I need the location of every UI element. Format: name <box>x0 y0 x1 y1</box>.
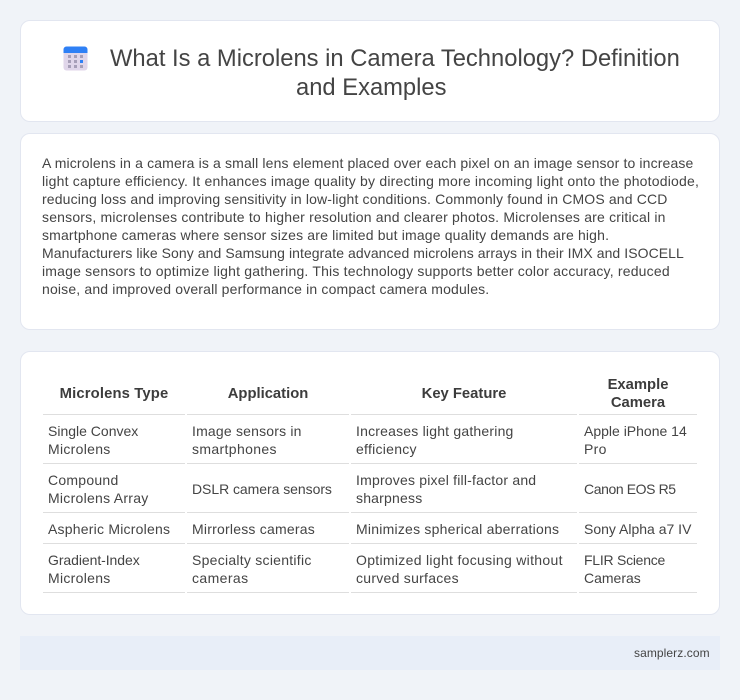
row: gradient-index: FLIR Science <box>584 552 665 568</box>
row: aspheric: Sony Alpha a7 IV <box>584 521 691 537</box>
title: What Is a Microlens in Camera Technology? Definition <box>110 45 680 72</box>
row: gradient-index: Gradient-Index <box>48 552 140 568</box>
footer bar <box>20 636 720 670</box>
table panel <box>20 351 720 615</box>
icon: calendar <box>64 46 88 70</box>
row: gradient-index: Optimized light focusing without <box>356 552 563 568</box>
row: gradient-index: cameras <box>192 570 248 586</box>
column headers: Microlens Type <box>60 386 168 402</box>
description text: light capture efficiency. It enhances image quality by directing more incoming light onto the photodiode, <box>42 173 699 189</box>
column headers: Key Feature <box>422 386 506 402</box>
title <box>110 45 680 101</box>
title: and Examples <box>296 74 447 101</box>
column headers: Application <box>228 386 308 402</box>
row: gradient-index: curved surfaces <box>356 570 459 586</box>
row: gradient-index <box>48 552 665 586</box>
description text: image sensors to optimize light gathering. This technology supports better color accuracy, reduced <box>42 263 670 279</box>
row: single convex <box>48 423 687 457</box>
row: aspheric: Mirrorless cameras <box>192 521 315 537</box>
row: compound: sharpness <box>356 490 422 506</box>
description text: A microlens in a camera is a small lens element placed over each pixel on an image sensor to increase <box>42 155 693 171</box>
description text: sensors, microlenses contribute to higher resolution and clearer photos. Microlenses are critical in <box>42 209 666 225</box>
row: aspheric: Aspheric Microlens <box>48 521 170 537</box>
row: compound: Canon EOS R5 <box>584 481 676 497</box>
row: single convex: Increases light gathering <box>356 423 514 439</box>
row: single convex: Apple iPhone 14 <box>584 423 687 439</box>
row: gradient-index: Specialty scientific <box>192 552 312 568</box>
row: compound: Microlens Array <box>48 490 149 506</box>
row: gradient-index: Microlens <box>48 570 111 586</box>
row: compound <box>48 472 676 506</box>
row: compound: Compound <box>48 472 118 488</box>
description panel <box>20 133 720 330</box>
row: gradient-index: Cameras <box>584 570 641 586</box>
row: single convex: Single Convex <box>48 423 138 439</box>
row: single convex: Microlens <box>48 441 111 457</box>
description text: Manufacturers like Sony and Samsung integrate advanced microlens arrays in their IMX and ISOCELL <box>42 245 684 261</box>
header panel <box>20 20 720 122</box>
description text: reducing loss and improving sensitivity in low-light conditions. Commonly found in CMOS and CCD <box>42 191 667 207</box>
column headers <box>60 377 668 411</box>
row: aspheric: Minimizes spherical aberrations <box>356 521 559 537</box>
description text: noise, and improved overall performance in compact camera modules. <box>42 281 489 297</box>
row: aspheric <box>48 521 692 537</box>
row: single convex: Image sensors in <box>192 423 302 439</box>
description text <box>42 155 699 297</box>
footer source text: samplerz.com <box>634 646 710 660</box>
description text: smartphone cameras where sensor sizes are limited but image quality demands are high. <box>42 227 609 243</box>
row: single convex: smartphones <box>192 441 277 457</box>
column headers: Camera <box>611 395 665 411</box>
column headers: Example <box>608 377 668 393</box>
row: compound: Improves pixel fill-factor and <box>356 472 536 488</box>
row: single convex: efficiency <box>356 441 417 457</box>
row: compound: DSLR camera sensors <box>192 481 332 497</box>
table: microlens types <box>43 377 697 593</box>
row: single convex: Pro <box>584 441 607 457</box>
